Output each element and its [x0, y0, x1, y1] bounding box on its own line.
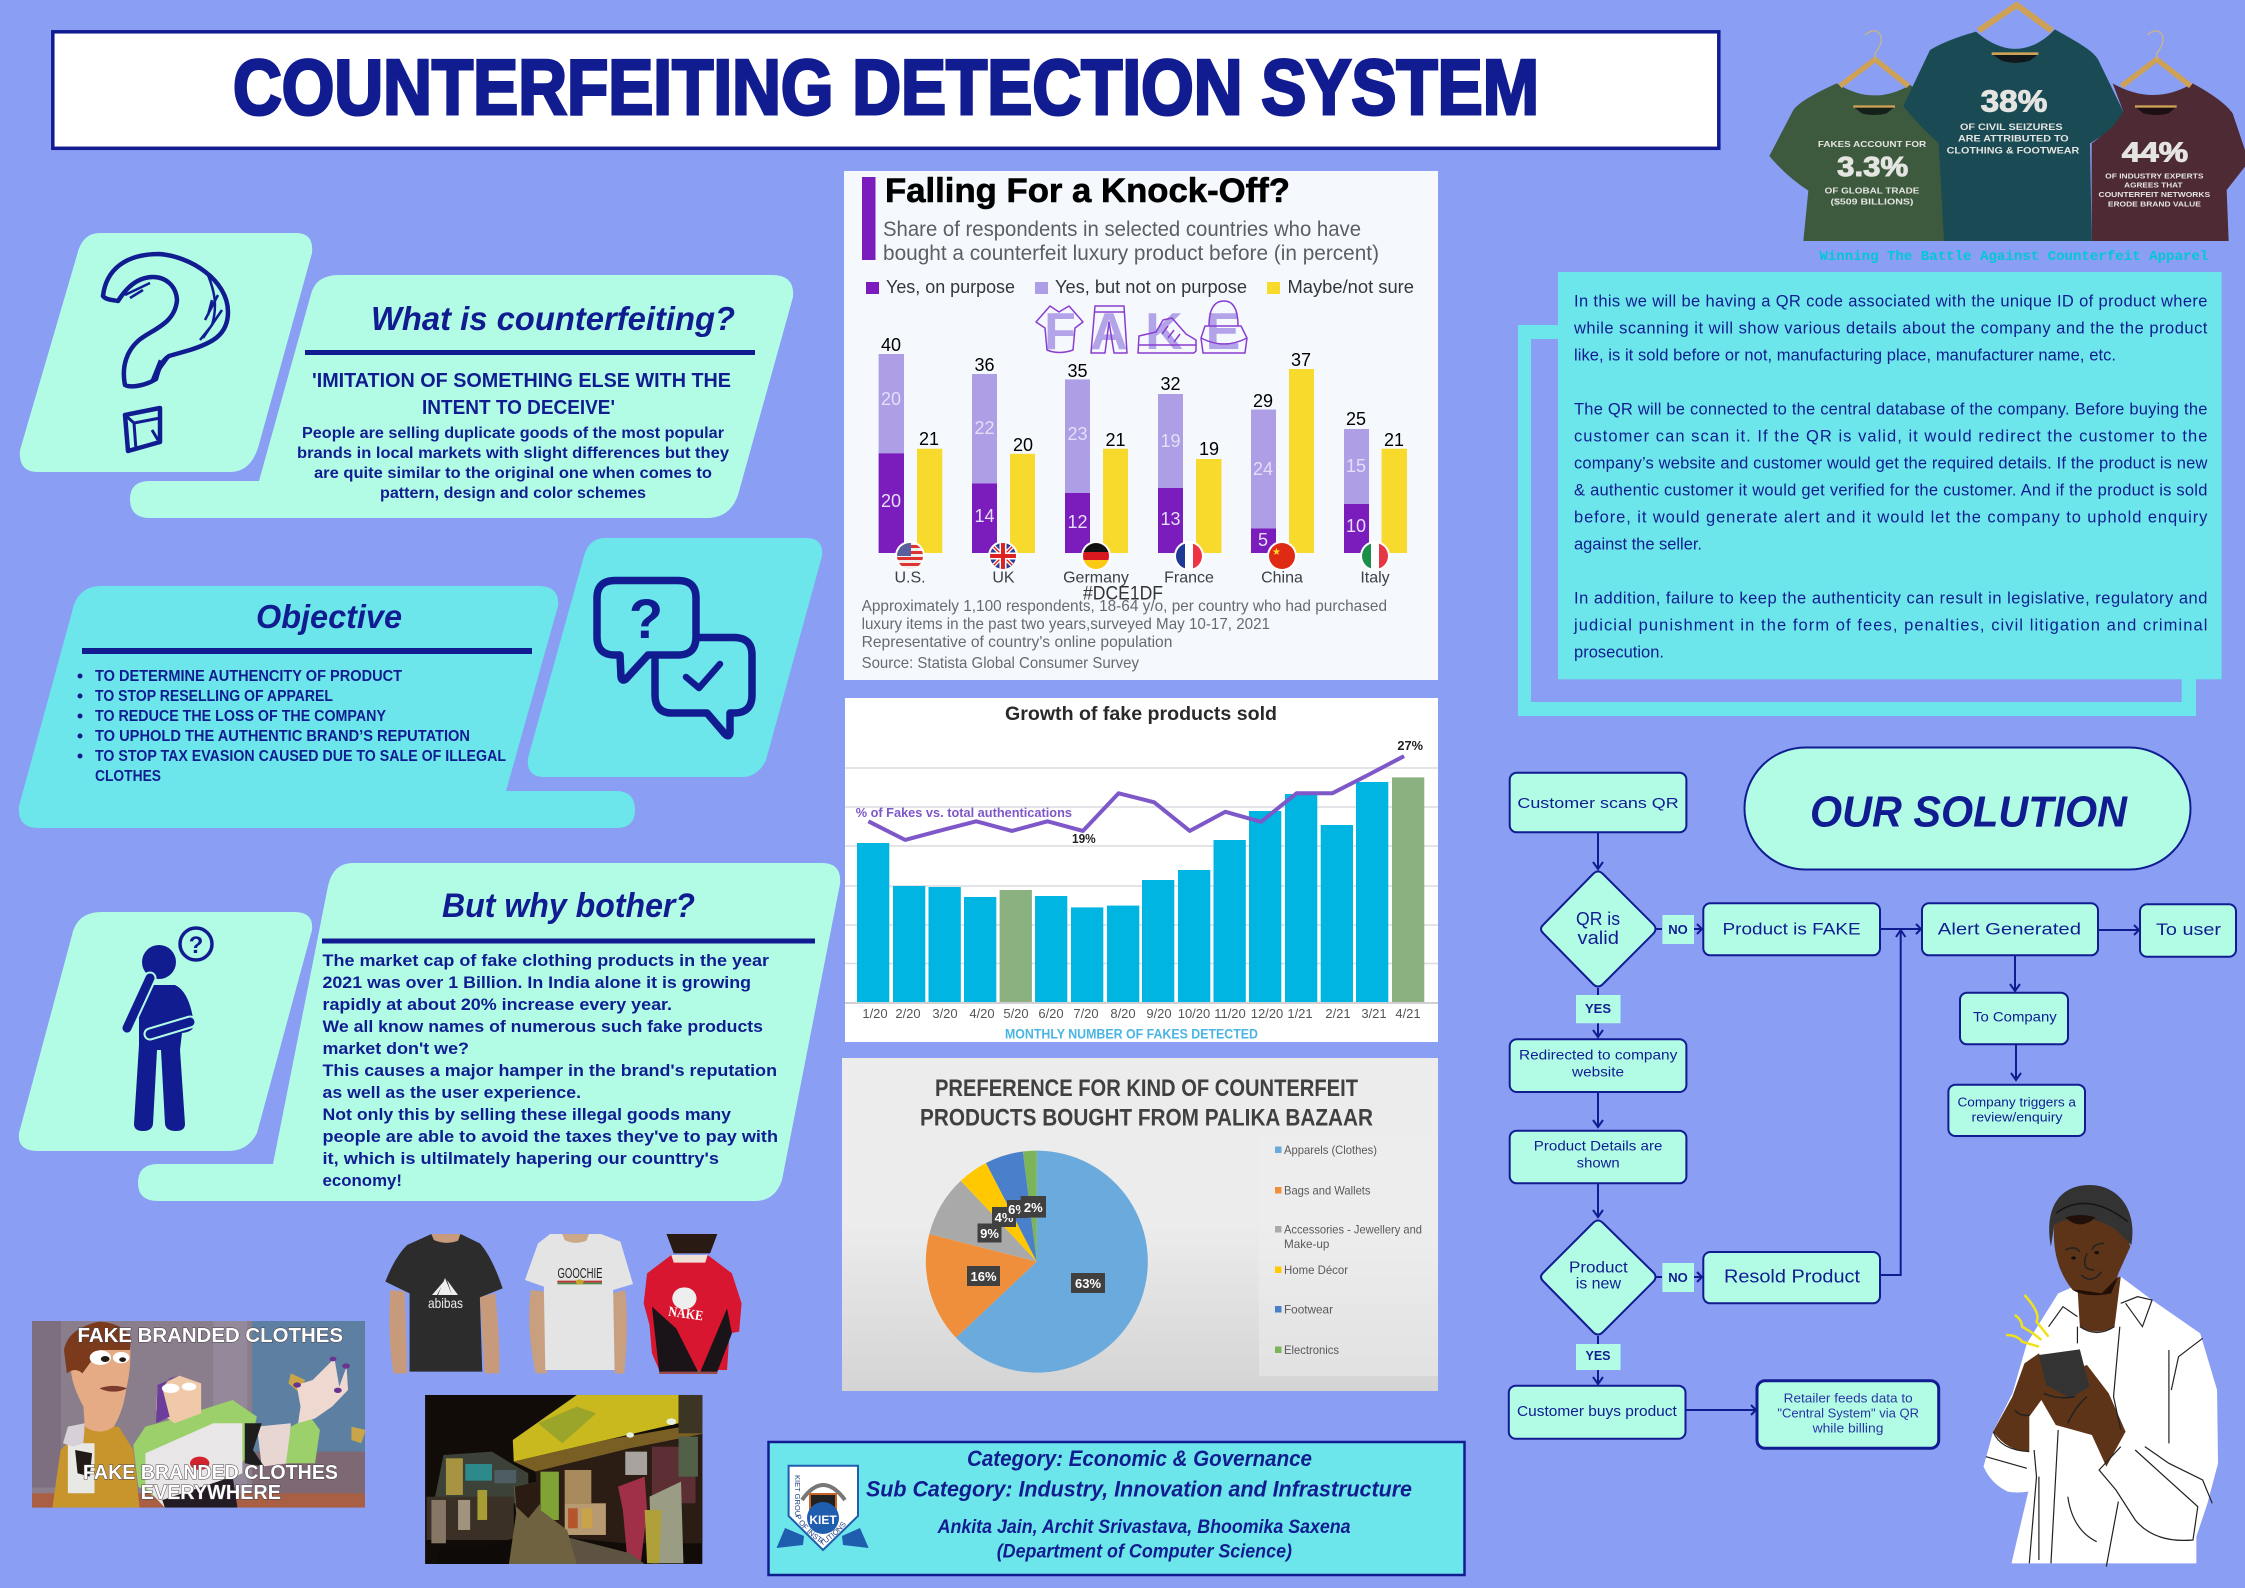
bar values: 19 — [1160, 431, 1181, 451]
country labels: Italy — [1360, 570, 1390, 586]
label: yes: YES — [1585, 1349, 1611, 1363]
list: objectives: TO UPHOLD THE AUTHENTIC BRAND’S REPUTATION — [95, 728, 470, 745]
logo: KIET — [776, 1464, 869, 1552]
text block: why bother — [322, 951, 778, 1190]
teal shirt: CLOTHING & FOOTWEAR — [1947, 145, 2080, 155]
text block: solution: judicial punishment in the form of fees, penalties, civil litigation and criminal — [1573, 617, 2207, 635]
text block: why bother: market don't we? — [322, 1039, 469, 1058]
fake icons: F — [1044, 303, 1076, 361]
bars — [857, 777, 1424, 1003]
image: market photo — [425, 1395, 702, 1564]
x axis labels: 3/20 — [932, 1006, 958, 1021]
text block: category: Category: Economic & Governance — [967, 1446, 1312, 1471]
text block: why bother: 2021 was over 1 Billion. In India alone it is growing — [322, 973, 751, 992]
heading: objective: Objective — [256, 598, 402, 635]
teal shirt: ARE ATTRIBUTED TO — [1958, 134, 2069, 144]
legend: Yes, on purpose — [886, 277, 1015, 297]
node: retailer feeds data: Retailer feeds data to — [1784, 1391, 1913, 1406]
label: no: NO — [1668, 922, 1688, 937]
country labels: U.S. — [894, 570, 926, 586]
pie legend: Bags and Wallets — [1284, 1184, 1370, 1198]
node: retailer feeds data — [1757, 1381, 1939, 1448]
image: fake branded tees — [385, 1234, 742, 1374]
country labels: China — [1261, 570, 1303, 586]
text block: category: Ankita Jain, Archit Srivastava, Bhoomika Saxena — [937, 1516, 1351, 1538]
panel: thinker icon — [19, 912, 312, 1151]
caption: Winning The Battle Against Counterfeit Apparel — [1819, 249, 2208, 265]
green shirt: 3.3% — [1837, 151, 1908, 182]
panel: objective — [19, 586, 635, 828]
image: meme: FAKE BRANDED CLOTHES — [78, 1325, 343, 1347]
text block: category — [866, 1446, 1412, 1563]
label: yes — [1576, 995, 1620, 1023]
x axis labels: 4/21 — [1395, 1006, 1421, 1021]
decision: QR is valid — [1541, 872, 1656, 986]
node: retailer feeds data: "Central System" via QR — [1777, 1406, 1919, 1421]
text block: solution: company’s website and customer would get the required details. If the product is new — [1574, 455, 2207, 473]
list: objectives: TO STOP RESELLING OF APPAREL — [95, 688, 333, 705]
bar values: 10 — [1346, 516, 1366, 536]
chart: preference pie — [842, 1058, 1438, 1391]
pie slices — [926, 1151, 1148, 1373]
x axis labels: 2/20 — [895, 1006, 921, 1021]
label: yes — [1576, 1344, 1620, 1370]
fake icons: E — [1206, 303, 1240, 361]
pie labels: 6% — [1008, 1202, 1027, 1217]
bar values: 20 — [1013, 435, 1033, 455]
node: redirected: Redirected to company — [1519, 1046, 1677, 1062]
node: redirected — [1510, 1039, 1686, 1092]
node: product details: shown — [1577, 1155, 1620, 1171]
panel: objective icon — [528, 538, 822, 777]
bar values: 35 — [1067, 361, 1088, 381]
bar values: 15 — [1346, 456, 1366, 476]
connectors — [1593, 832, 2139, 1415]
legend — [866, 277, 1414, 297]
bar values: 21 — [919, 429, 939, 449]
chart footnote: luxury items in the past two years,surveyed May 10-17, 2021 — [862, 616, 1270, 633]
flags: ★ — [1272, 547, 1281, 558]
bar values: 29 — [1253, 391, 1273, 411]
node: customer scans QR — [1510, 773, 1686, 832]
pie labels: 2% — [1024, 1200, 1043, 1215]
bar values: 37 — [1291, 350, 1311, 370]
node: product is fake: Product is FAKE — [1722, 919, 1861, 938]
bar values: 14 — [974, 506, 995, 526]
node: resold product — [1703, 1252, 1880, 1303]
label: no — [1662, 1263, 1694, 1292]
text block: solution: prosecution. — [1574, 644, 1664, 662]
x axis labels: 2/21 — [1325, 1006, 1351, 1021]
image: meme — [32, 1321, 366, 1508]
image: meme: EVERYWHERE — [141, 1482, 281, 1504]
pie labels — [967, 1196, 1105, 1293]
chart subtitle: bought a counterfeit luxury product before (in percent) — [883, 242, 1379, 265]
heading: but why bother: But why bother? — [442, 887, 695, 925]
pie legend: Footwear — [1284, 1303, 1333, 1317]
list: objectives: TO REDUCE THE LOSS OF THE COMPANY — [95, 708, 386, 725]
line labels: % of Fakes vs. total authentications — [856, 805, 1072, 820]
legend: Yes, but not on purpose — [1055, 277, 1247, 297]
node: to user: To user — [2156, 920, 2221, 939]
heading: our solution: OUR SOLUTION — [1810, 788, 2128, 837]
text block: why bother: it, which is ultilmately hapering our counttry's — [322, 1149, 719, 1168]
text block: why bother: We all know names of numerous such fake products — [322, 1017, 763, 1036]
green shirt: OF GLOBAL TRADE — [1825, 186, 1920, 196]
chart footnote — [862, 598, 1387, 672]
text block: why bother: Not only this by selling these illegal goods many — [322, 1105, 732, 1124]
panel: but why bother — [138, 863, 840, 1201]
pie legend: Home Décor — [1284, 1263, 1348, 1277]
chart title: PRODUCTS BOUGHT FROM PALIKA BAZAAR — [920, 1105, 1373, 1132]
title: COUNTERFEITING DETECTION SYSTEM — [233, 43, 1539, 131]
x axis labels: 8/20 — [1110, 1006, 1136, 1021]
node: company triggers review: Company triggers a — [1958, 1095, 2077, 1110]
teal shirt: 38% — [1981, 85, 2047, 119]
country labels: UK — [992, 570, 1015, 586]
pie legend — [1275, 1143, 1422, 1357]
text block: why bother: The market cap of fake clothing products in the year — [322, 951, 769, 970]
chart title — [920, 1075, 1373, 1132]
text block: why bother: economy! — [322, 1171, 402, 1190]
list: objectives: TO STOP TAX EVASION CAUSED DUE TO SALE OF ILLEGAL — [95, 748, 506, 765]
bar values: 23 — [1067, 424, 1088, 444]
node: customer buys product — [1509, 1386, 1686, 1439]
bar values: 22 — [974, 418, 995, 438]
stray colour label: #DCE1DF — [1083, 582, 1163, 604]
panel: category box — [767, 1440, 1466, 1576]
label: no — [1662, 915, 1694, 944]
text block: solution: The QR will be connected to the central database of the company. Before buying the — [1574, 401, 2207, 419]
x axis labels: 3/21 — [1361, 1006, 1387, 1021]
country labels — [894, 570, 1390, 586]
text block: description — [297, 425, 729, 502]
x axis labels: 9/20 — [1146, 1006, 1172, 1021]
bar values: 12 — [1067, 512, 1088, 532]
pie labels: 9% — [980, 1226, 999, 1241]
bar values: 5 — [1258, 530, 1268, 550]
chart title: PREFERENCE FOR KIND OF COUNTERFEIT — [935, 1075, 1358, 1102]
text block: category: Sub Category: Industry, Innovation and Infrastructure — [866, 1477, 1412, 1502]
green shirt: ($509 BILLIONS) — [1830, 197, 1914, 207]
bar values: 21 — [1105, 430, 1126, 450]
maroon shirt: COUNTERFEIT NETWORKS — [2098, 190, 2210, 199]
x axis labels: 5/20 — [1003, 1006, 1029, 1021]
list: objectives: TO DETERMINE AUTHENCITY OF PRODUCT — [95, 668, 402, 685]
maroon shirt: ERODE BRAND VALUE — [2108, 199, 2201, 208]
text block: solution: customer can scan it. If the QR is valid, it would redirect the customer to the — [1574, 428, 2207, 446]
x axis labels: 1/20 — [862, 1006, 888, 1021]
text block: why bother: rapidly at about 20% increase every year. — [322, 995, 672, 1014]
bar values — [881, 335, 1404, 550]
decision: product is new: Product — [1569, 1260, 1628, 1277]
chart subtitle — [883, 218, 1379, 265]
icon: speech bubbles — [597, 580, 752, 736]
icon: speech bubbles: ? — [629, 587, 663, 650]
image: fake branded tees: abibas — [428, 1295, 463, 1311]
bar values: 40 — [881, 335, 901, 355]
chart title: Growth of fake products sold — [1005, 704, 1277, 725]
fake icons — [1036, 301, 1247, 361]
heading: what is counterfeiting: What is counterfeiting? — [371, 300, 735, 337]
decision: product is new: is new — [1576, 1276, 1621, 1293]
bars — [879, 354, 1407, 553]
chart footnote: Source: Statista Global Consumer Survey — [862, 655, 1139, 672]
green shirt: FAKES ACCOUNT FOR — [1818, 139, 1926, 149]
maroon shirt: AGREES THAT — [2124, 181, 2183, 190]
flags — [895, 541, 1390, 571]
list: objectives: CLOTHES — [95, 768, 161, 785]
node: alert generated — [1922, 903, 2098, 955]
fake icons: K — [1145, 303, 1183, 361]
label: no: NO — [1668, 1270, 1688, 1285]
panel: question mark icon — [20, 233, 312, 472]
text block: definition — [312, 370, 731, 419]
text block: description: are quite similar to the original one when comes to — [314, 465, 712, 482]
node: company triggers review — [1948, 1085, 2085, 1136]
node: to company: To Company — [1973, 1009, 2057, 1025]
chart subtitle: Share of respondents in selected countries who have — [883, 218, 1361, 241]
bar values: 20 — [881, 491, 901, 511]
chart footnote: Approximately 1,100 respondents, 18-64 y/o, per country who had purchased — [862, 598, 1387, 615]
text block: description: People are selling duplicate goods of the most popular — [302, 425, 724, 442]
bar values: 36 — [974, 355, 995, 375]
line labels: 19% — [1072, 831, 1096, 846]
text block: description: brands in local markets with slight differences but they — [297, 445, 729, 462]
text block: definition: 'IMITATION OF SOMETHING ELSE WITH THE — [312, 370, 731, 392]
node: to user — [2140, 904, 2236, 957]
bar values: 20 — [881, 389, 901, 409]
node: customer scans QR: Customer scans QR — [1517, 795, 1679, 812]
label: yes: YES — [1585, 1001, 1611, 1016]
x axis labels: 7/20 — [1073, 1006, 1099, 1021]
x axis labels: 4/20 — [969, 1006, 995, 1021]
x axis labels: 11/20 — [1214, 1006, 1246, 1021]
maroon shirt — [2092, 31, 2245, 241]
text block: definition: INTENT TO DECEIVE' — [422, 397, 615, 419]
chart title: Falling For a Knock-Off? — [885, 172, 1290, 210]
panel: solution description — [1518, 272, 2222, 716]
text block: solution: In this we will be having a QR code associated with the unique ID of product where — [1574, 293, 2207, 311]
bar values: 25 — [1346, 409, 1366, 429]
icon: thinking person: ? — [189, 932, 203, 959]
pie labels: 63% — [1075, 1276, 1101, 1291]
decision: QR is valid: QR is — [1576, 909, 1620, 929]
image: meme: FAKE BRANDED CLOTHES — [83, 1462, 338, 1484]
node: product is fake — [1703, 903, 1880, 955]
chart: growth of fake products — [845, 698, 1438, 1042]
node: product details: Product Details are — [1534, 1138, 1663, 1154]
text block: solution: against the seller. — [1574, 536, 1702, 554]
text block: why bother: as well as the user experience. — [322, 1083, 581, 1102]
node: product details — [1510, 1131, 1686, 1183]
list: objectives — [78, 668, 506, 785]
text block: solution — [1573, 293, 2208, 662]
node: retailer feeds data: while billing — [1812, 1421, 1883, 1436]
node: company triggers review: review/enquiry — [1972, 1110, 2063, 1125]
node: to company — [1960, 993, 2068, 1044]
pie legend: Apparels (Clothes) — [1284, 1143, 1377, 1157]
country labels: France — [1164, 570, 1214, 586]
text block: solution: before, it would generate alert and it would let the company to uphold enquiry — [1574, 509, 2208, 527]
text block: solution: while scanning it will show various details about the company and the the product — [1573, 320, 2208, 338]
chart: falling for a knock-off — [844, 171, 1438, 680]
heading: our solution — [1744, 748, 2190, 870]
bar values: 13 — [1160, 509, 1181, 529]
decision: QR is valid: valid — [1578, 928, 1619, 948]
text block: solution: & authentic customer it would get verified for the customer. And if the product is sold — [1574, 482, 2207, 500]
line labels: 27% — [1397, 738, 1423, 753]
axis title: MONTHLY NUMBER OF FAKES DETECTED — [1005, 1027, 1258, 1042]
panel: what is counterfeiting — [130, 275, 793, 518]
node: redirected: website — [1571, 1064, 1624, 1080]
x axis labels: 12/20 — [1251, 1006, 1283, 1021]
node: customer buys product: Customer buys product — [1517, 1404, 1677, 1420]
text block: description: pattern, design and color schemes — [380, 485, 646, 502]
fake icons: A — [1090, 303, 1128, 361]
node: resold product: Resold Product — [1724, 1266, 1860, 1286]
teal shirt — [1903, 5, 2123, 241]
text block: why bother: This causes a major hamper in the brand's reputation — [322, 1061, 777, 1080]
bar values: 24 — [1253, 459, 1273, 479]
trend line — [868, 756, 1404, 840]
flowchart — [1509, 773, 2236, 1448]
x axis labels: 10/20 — [1178, 1006, 1210, 1021]
icon: question mark — [103, 254, 228, 451]
illustration: man scanning with phone — [1984, 1185, 2218, 1567]
image: fake branded tees: NAKE — [667, 1305, 704, 1324]
logo: KIET: KIET GROUP OF INSTITUTIONS — [795, 1476, 846, 1545]
legend: Maybe/not sure — [1288, 277, 1414, 297]
x axis labels: 1/21 — [1287, 1006, 1313, 1021]
bar values: 32 — [1160, 374, 1181, 394]
maroon shirt: OF INDUSTRY EXPERTS — [2105, 171, 2203, 180]
logo: KIET: KIET — [809, 1513, 837, 1527]
node: alert generated: Alert Generated — [1938, 919, 2081, 938]
title — [53, 32, 1719, 148]
text block: why bother: people are able to avoid the taxes they've to pay with — [322, 1127, 778, 1146]
image: t-shirt statistics — [1769, 5, 2245, 265]
bar values: 19 — [1199, 439, 1219, 459]
bar values: 21 — [1384, 430, 1404, 450]
image: fake branded tees: GOOCHIE — [558, 1265, 602, 1282]
maroon shirt: 44% — [2122, 137, 2188, 168]
pie legend: Make-up — [1284, 1237, 1330, 1251]
line labels — [856, 738, 1423, 846]
x axis labels — [862, 1006, 1421, 1021]
pie labels: 16% — [970, 1269, 997, 1284]
text block: category: (Department of Computer Science) — [997, 1541, 1292, 1563]
pie legend: Electronics — [1284, 1343, 1339, 1357]
text block: solution: In addition, failure to keep the authenticity can result in legislative, regulatory and — [1574, 590, 2207, 608]
green shirt — [1769, 31, 1953, 241]
decision: product is new — [1541, 1220, 1656, 1334]
pie labels: 4% — [995, 1210, 1014, 1225]
pie legend: Accessories - Jewellery and — [1284, 1222, 1422, 1236]
x axis labels: 6/20 — [1038, 1006, 1064, 1021]
country labels: Germany — [1063, 570, 1129, 586]
teal shirt: OF CIVIL SEIZURES — [1960, 122, 2063, 132]
chart footnote: Representative of country's online population — [862, 634, 1172, 651]
text block: solution: like, is it sold before or not, manufacturing place, manufacturer name, etc. — [1574, 347, 2116, 365]
icon: thinking person — [127, 928, 212, 1131]
